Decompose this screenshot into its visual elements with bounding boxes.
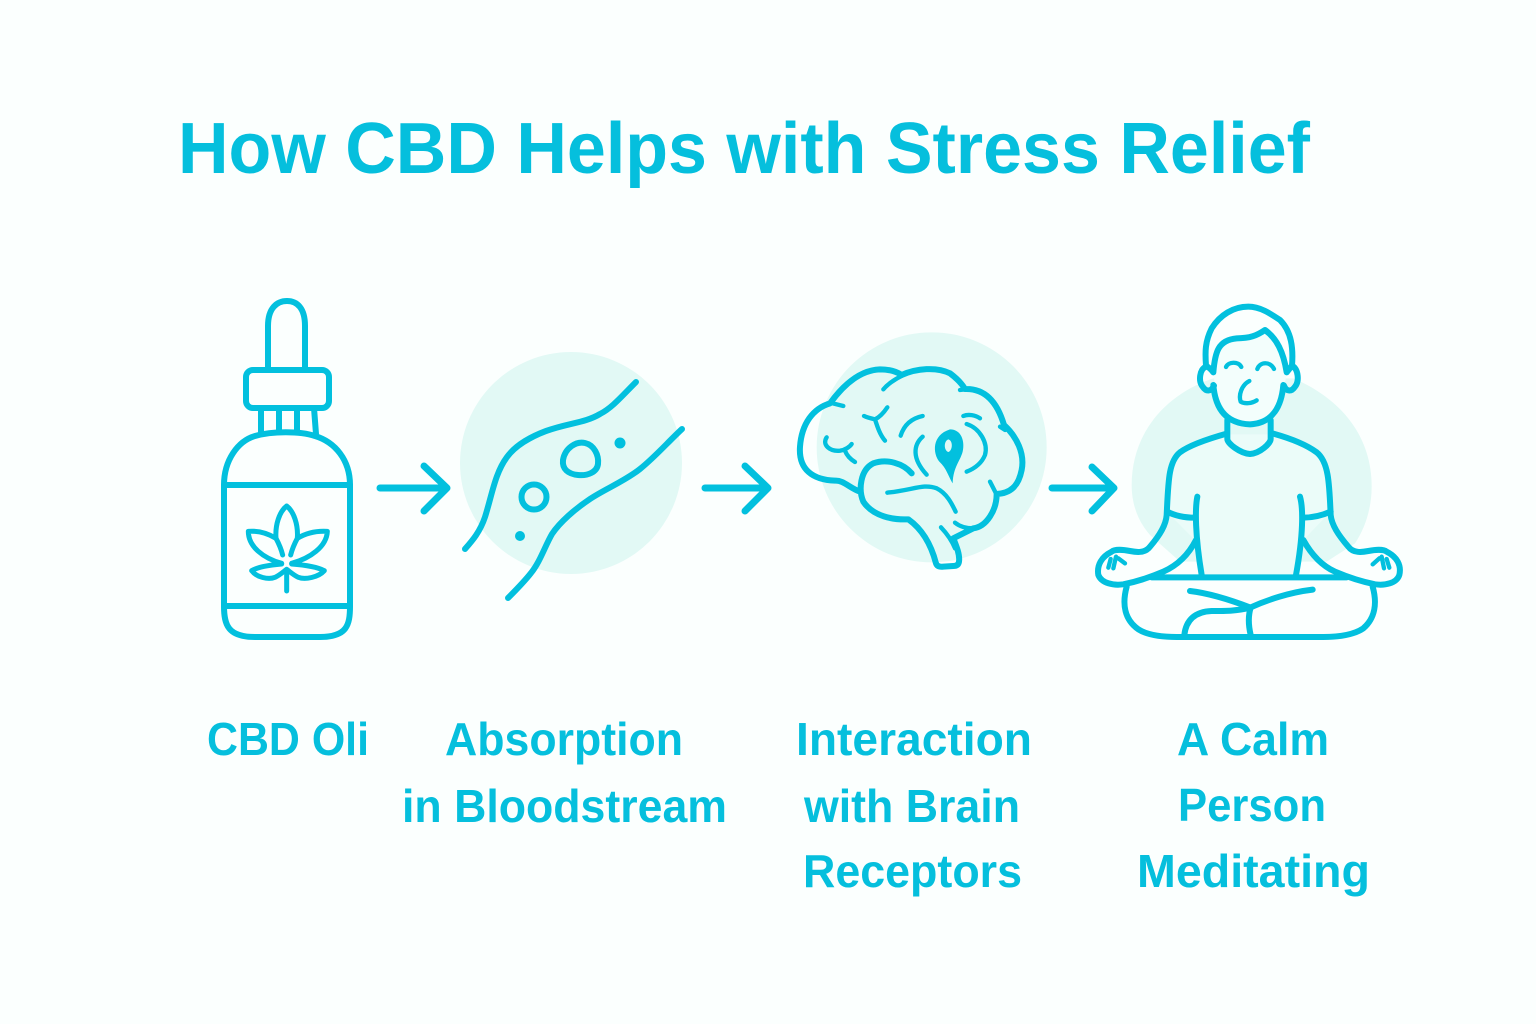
label: brain receptors step: Interaction xyxy=(796,713,1032,765)
icon: cannabis leaf xyxy=(248,506,327,591)
torso fill xyxy=(1167,434,1331,577)
icon: bloodstream vessel xyxy=(460,352,682,598)
label: CBD Oil step: CBD Oli xyxy=(207,713,369,765)
lap xyxy=(1152,568,1347,586)
face: eyes and nose xyxy=(1226,363,1241,367)
icon: CBD oil dropper bottle xyxy=(224,301,350,637)
background circle xyxy=(817,332,1047,562)
shoulders and arms xyxy=(1098,434,1227,585)
receptor marker xyxy=(935,429,963,483)
face xyxy=(1213,385,1283,424)
title: How CBD Helps with Stress Relief xyxy=(178,109,1311,189)
background circle xyxy=(1132,378,1372,562)
icon: calm person meditating xyxy=(1098,307,1400,637)
label: absorption step xyxy=(402,713,727,832)
label: calm person step: A Calm xyxy=(1177,713,1329,765)
label: brain receptors step: with Brain xyxy=(803,780,1020,832)
ears xyxy=(1200,367,1214,391)
icon: brain with receptor xyxy=(800,332,1047,567)
fingers xyxy=(1108,557,1125,568)
hair xyxy=(1206,307,1292,372)
arrow: oil to bloodstream xyxy=(380,466,447,511)
arrow: bloodstream to brain xyxy=(705,466,768,511)
label: calm person step: Person xyxy=(1178,779,1326,831)
arrow: brain to person xyxy=(1052,467,1114,511)
label: calm person step: Meditating xyxy=(1137,845,1370,897)
label: brain receptors step: Receptors xyxy=(803,845,1022,897)
label: calm person step xyxy=(1137,713,1370,897)
head fill xyxy=(1213,330,1287,423)
neck and collar xyxy=(1227,420,1271,454)
background circle xyxy=(460,352,682,574)
label: absorption step: Absorption xyxy=(445,713,683,765)
label: absorption step: in Bloodstream xyxy=(402,780,727,832)
label: brain receptors step xyxy=(796,713,1032,897)
